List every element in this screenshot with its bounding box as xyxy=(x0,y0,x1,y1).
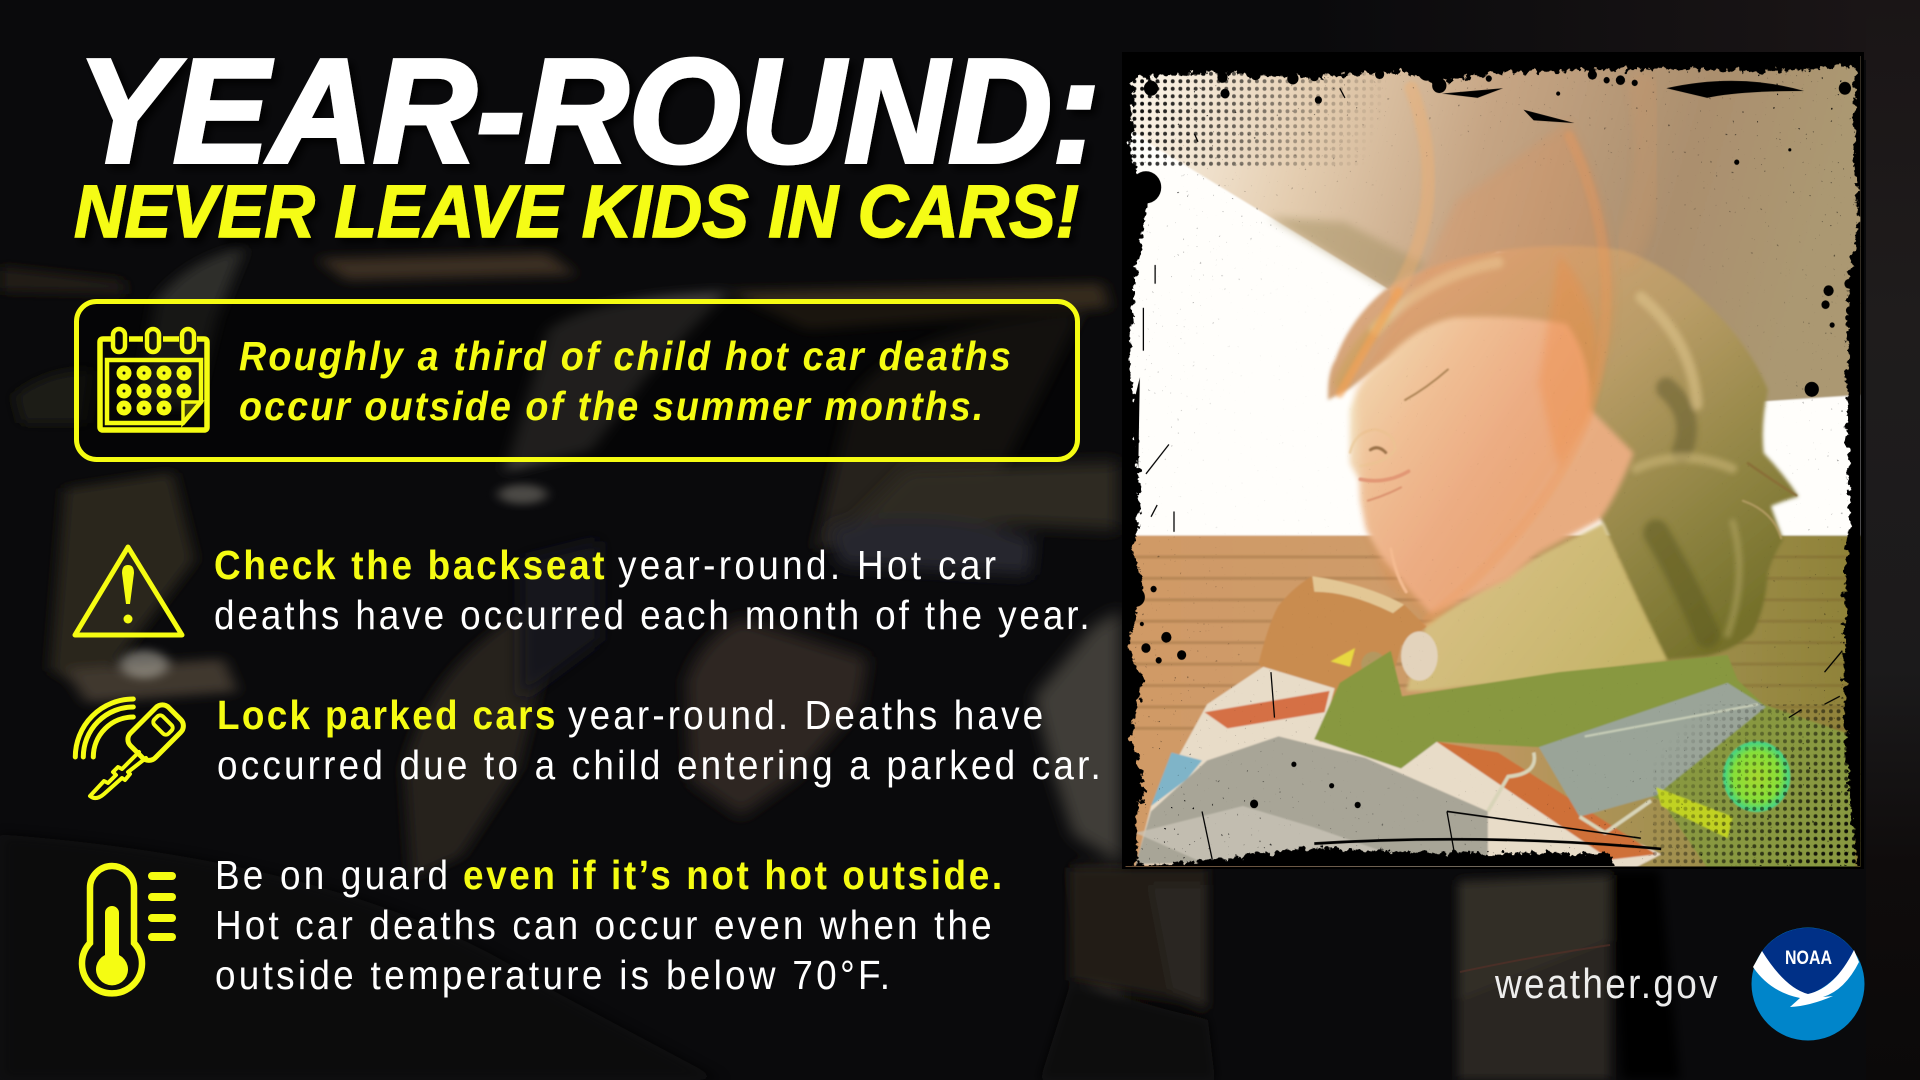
photo: neck bump and button xyxy=(1331,631,1438,681)
photo: brush strokes at bottom xyxy=(1314,811,1661,849)
photo: rough black frame edge xyxy=(1126,56,1860,866)
photo: hair strands xyxy=(1340,262,1739,635)
icon: car key xyxy=(75,699,187,798)
photo: shirt collar xyxy=(1259,576,1427,704)
tip 3 text: Be on guard xyxy=(215,853,448,898)
photo: orange and white shirt stripes xyxy=(1136,667,1661,868)
callout box xyxy=(76,302,1078,460)
logo: NOAA: NOAA xyxy=(1785,948,1832,969)
tip 1 text: deaths have occurred each month of the year. xyxy=(214,593,1090,638)
photo: thin scratch marks xyxy=(1143,88,1842,860)
tip 2 text: year-round. Deaths have xyxy=(568,693,1043,738)
photo: green shirt xyxy=(1314,651,1855,868)
tip 3 text xyxy=(215,853,1002,998)
tip 3 text: Hot car deaths can occur even when the xyxy=(215,903,992,948)
icon: warning triangle xyxy=(75,547,182,635)
photo: lens flare xyxy=(1340,88,1649,621)
photo: fine black speckle xyxy=(1132,67,1860,866)
photo: overalls bib xyxy=(1136,736,1488,864)
callout text: Roughly a third of child hot car deaths xyxy=(239,334,1011,379)
icon: thermometer xyxy=(82,866,172,993)
photo: back seat xyxy=(1120,536,1865,870)
photo: hair xyxy=(1328,246,1798,660)
photo: black grunge splatter xyxy=(1127,64,1854,808)
footer: weather.gov: weather.gov xyxy=(1494,961,1718,1008)
callout text xyxy=(239,334,1011,429)
photo: overalls strap xyxy=(1539,683,1766,817)
tip 3 text: even if it’s not hot outside. xyxy=(463,853,1002,898)
background: car at far right xyxy=(1866,0,1920,1080)
photo: sky through window xyxy=(1126,130,1860,537)
background: center car door and windows xyxy=(520,462,1121,1010)
icon: calendar xyxy=(100,329,207,430)
tip 1 text: year-round. Hot car xyxy=(618,543,996,588)
tip 3 text: outside temperature is below 70°F. xyxy=(215,953,890,998)
photo: facial features xyxy=(1350,369,1448,592)
photo: car ceiling xyxy=(1120,51,1865,402)
tip 2 text: Lock parked cars xyxy=(217,693,555,738)
photo: flyaway hair wisps xyxy=(1743,463,1796,538)
background: parked car doors at lower right xyxy=(1040,868,1680,1080)
photo: halftone overlays xyxy=(1131,67,1860,865)
photo: face xyxy=(1350,317,1634,614)
tip 2 text: occurred due to a child entering a parked car. xyxy=(217,743,1101,788)
photo panel: child asleep in a car seat xyxy=(1122,52,1864,869)
callout text: occur outside of the summer months. xyxy=(239,384,983,429)
tip 1 text: Check the backseat xyxy=(214,543,605,588)
subtitle: NEVER LEAVE KIDS IN CARS! xyxy=(74,170,1079,253)
photo: neck xyxy=(1406,523,1667,691)
title: YEAR-ROUND: xyxy=(77,29,1100,194)
tip 1 text xyxy=(214,543,1090,638)
tip 2 text xyxy=(217,693,1101,788)
logo: NOAA xyxy=(1752,928,1864,1040)
photo: green lens flare spot xyxy=(1656,741,1790,838)
